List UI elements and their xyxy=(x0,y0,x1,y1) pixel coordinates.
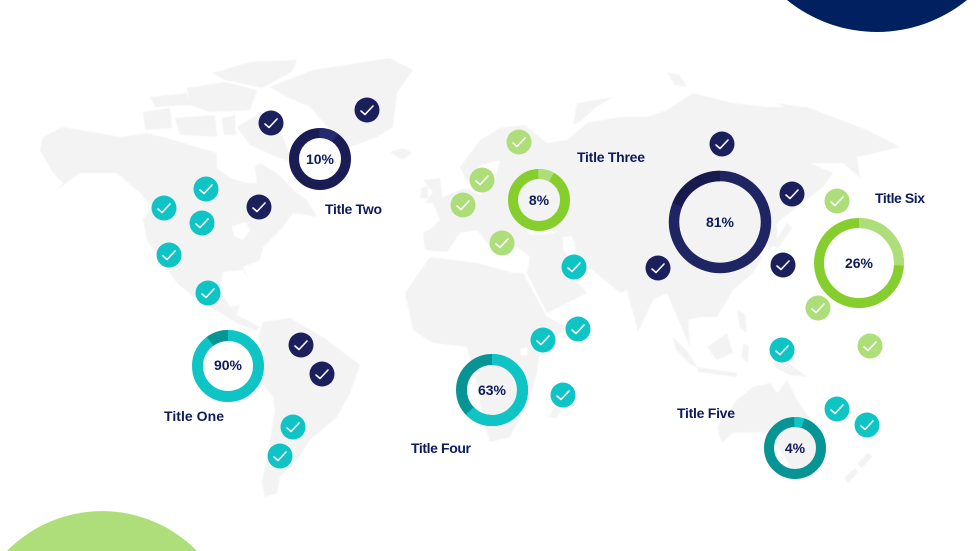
check badges: light green xyxy=(450,130,882,358)
title three: Title Three xyxy=(577,149,645,165)
donut: 26% xyxy=(819,223,899,303)
title four: Title Four xyxy=(411,440,472,456)
decorative green circle, bottom left xyxy=(7,511,197,551)
title one: Title One xyxy=(164,408,224,424)
donut: 4%: 4% xyxy=(785,440,806,456)
donut: 4% xyxy=(769,422,821,474)
donut: 90% xyxy=(198,336,258,396)
donut: 81%: 81% xyxy=(706,214,735,230)
title six: Title Six xyxy=(875,190,925,206)
donut: 26%: 26% xyxy=(845,255,874,271)
donut: 63% xyxy=(462,360,522,420)
donut: 90%: 90% xyxy=(214,357,243,373)
title two: Title Two xyxy=(325,201,382,217)
title five: Title Five xyxy=(677,405,735,421)
donut: 8% xyxy=(513,174,565,226)
check badges: navy xyxy=(246,98,804,386)
world map xyxy=(40,58,900,497)
donut: 8%: 8% xyxy=(529,192,550,208)
check badges: teal xyxy=(152,176,880,468)
donut: 63%: 63% xyxy=(478,382,507,398)
donut: 10%: 10% xyxy=(306,151,335,167)
decorative navy circle, top right xyxy=(787,0,967,32)
donut: 81% xyxy=(674,176,766,268)
donut: 10% xyxy=(294,133,346,185)
